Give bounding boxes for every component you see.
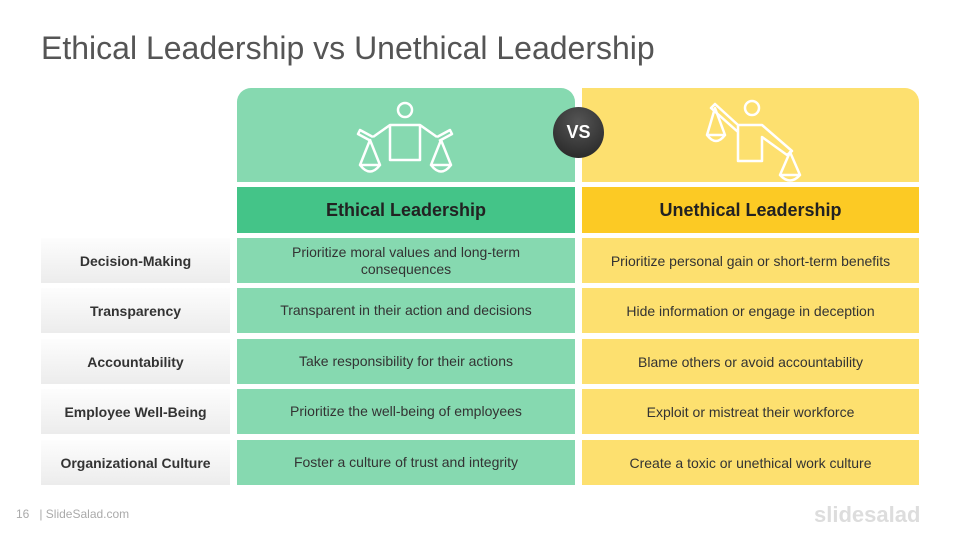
row: decision-making (41, 238, 919, 283)
row: accountability (41, 339, 919, 384)
panel: ethical icon header (237, 88, 575, 182)
icon: unbalanced scales person (706, 100, 802, 182)
panel: unethical icon header (582, 88, 919, 182)
logo: slidesalad (814, 502, 920, 527)
row: employee well-being: Employee Well-Being (64, 404, 207, 420)
heading: ethical (237, 187, 575, 233)
row: organizational culture: Foster a culture of trust and integrity (294, 454, 518, 470)
row: employee well-being: Exploit or mistreat their workforce (647, 404, 854, 420)
icon: VS badge (553, 107, 604, 158)
row: organizational culture (41, 440, 919, 485)
row: transparency: Transparent in their action and decisions (280, 302, 532, 318)
row: accountability: Blame others or avoid accountability (638, 354, 863, 370)
icon: balanced scales person (356, 102, 454, 173)
row: organizational culture: Organizational Culture (60, 454, 211, 470)
row: transparency: Hide information or engage in deception (626, 302, 875, 318)
row: transparency: Transparency (90, 302, 181, 318)
row: decision-making: Prioritize moral values and long-term consequences (292, 244, 520, 276)
footer: 16 | SlideSalad.com (16, 507, 129, 521)
row: transparency (41, 288, 919, 333)
row: employee well-being: Prioritize the well-being of employees (290, 403, 522, 419)
heading: unethical (582, 187, 919, 233)
heading: ethical: Ethical Leadership (326, 200, 486, 220)
heading: unethical: Unethical Leadership (659, 200, 842, 220)
icon: VS badge: VS (566, 122, 590, 142)
row: decision-making: Decision-Making (80, 252, 191, 268)
row: decision-making: Prioritize personal gain or short-term benefits (611, 252, 890, 268)
row: employee well-being (41, 389, 919, 434)
title: Ethical Leadership vs Unethical Leadership (41, 30, 655, 66)
row: accountability: Accountability (87, 354, 184, 370)
row: accountability: Take responsibility for their actions (299, 353, 513, 369)
row: organizational culture: Create a toxic or unethical work culture (630, 454, 872, 470)
